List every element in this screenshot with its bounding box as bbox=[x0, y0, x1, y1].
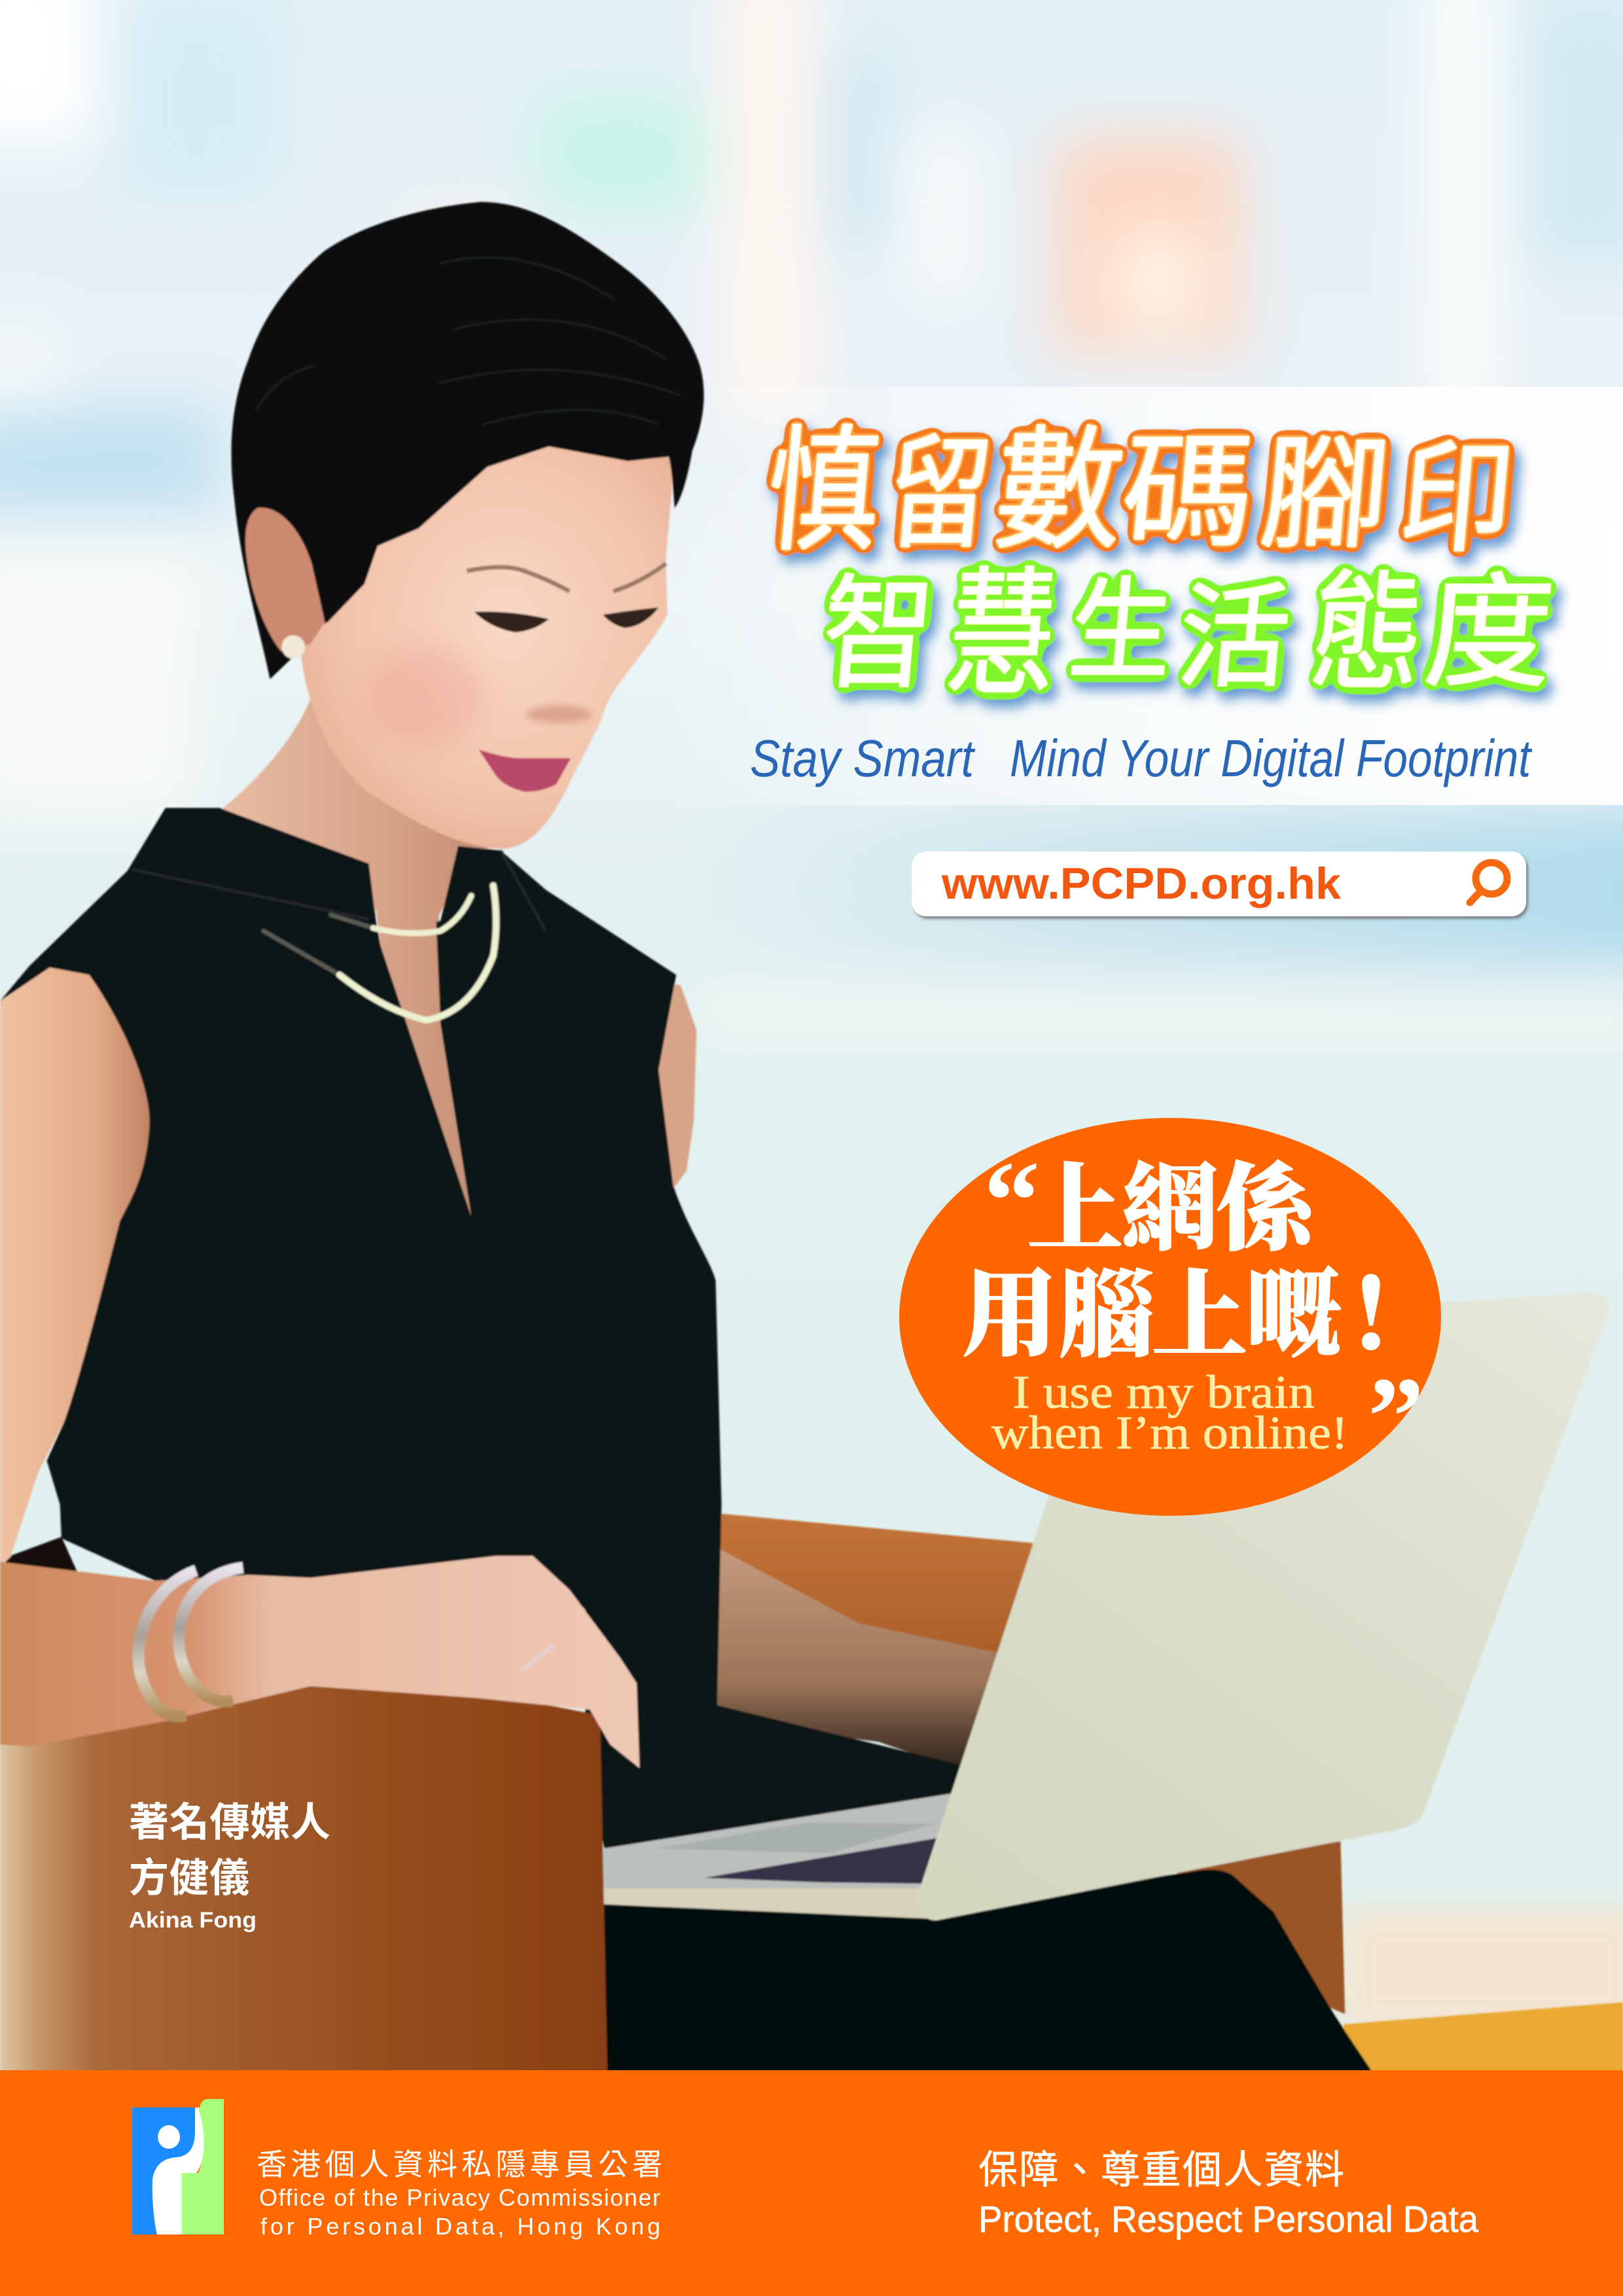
near forearm and hand bbox=[0, 1556, 639, 1768]
legs bbox=[600, 1870, 1373, 2073]
quote chinese line 2: 用腦上嘅！ bbox=[962, 1263, 1419, 1369]
slogan english bbox=[750, 729, 1532, 787]
slogan title: chinese line 2: 度 bbox=[1419, 533, 1561, 711]
organisation name: Office of the Privacy Commissioner bbox=[259, 2184, 660, 2211]
organisation name: 香港個人資料私隱專員公署 bbox=[257, 2147, 662, 2181]
slogan title: chinese line 1 bbox=[760, 381, 1521, 577]
floor bbox=[1344, 2002, 1623, 2079]
closing quote: ” bbox=[1368, 1355, 1424, 1479]
slogan title: chinese line 2: 生 bbox=[1064, 541, 1180, 701]
face bbox=[300, 439, 673, 849]
slogan english: Mind Your Digital Footprint bbox=[1010, 729, 1532, 787]
lips bbox=[478, 749, 571, 792]
icon: pcpd logo bbox=[132, 2099, 224, 2234]
person caption bbox=[129, 1800, 330, 1933]
quote english: I use my brain bbox=[1012, 1366, 1315, 1418]
slogan english: Stay Smart bbox=[750, 729, 975, 787]
laptop base bbox=[603, 1790, 973, 1919]
hair bbox=[231, 202, 704, 679]
slogan title: chinese line 1: 慎 bbox=[760, 381, 889, 577]
tagline: 保障、尊重個人資料 bbox=[978, 2148, 1344, 2192]
tagline: Protect, Respect Personal Data bbox=[978, 2198, 1478, 2240]
chair arm left bbox=[0, 1676, 607, 2073]
trackpad bbox=[657, 1822, 936, 1853]
speech bubble bbox=[899, 1118, 1441, 1516]
person caption: Akina Fong bbox=[129, 1908, 257, 1933]
slogan title: chinese line 2: 智 bbox=[816, 534, 942, 713]
organisation name: for Personal Data, Hong Kong bbox=[260, 2213, 660, 2240]
ring bbox=[522, 1645, 553, 1670]
organisation name bbox=[257, 2147, 662, 2240]
person caption: 著名傳媒人 bbox=[129, 1800, 330, 1844]
slogan title: chinese line 1: 印 bbox=[1395, 399, 1521, 577]
chair side right bbox=[1171, 1841, 1345, 2014]
slogan title: chinese line 1: 數 bbox=[989, 383, 1132, 575]
nose shadow bbox=[527, 706, 591, 723]
quote english: when I’m online! bbox=[991, 1407, 1348, 1459]
search box bbox=[912, 852, 1526, 916]
earring bbox=[281, 636, 305, 658]
ear bbox=[245, 508, 325, 651]
blouse bbox=[0, 808, 980, 1856]
footer bar bbox=[0, 2070, 1623, 2296]
hair highlights bbox=[256, 257, 681, 425]
near upper arm bbox=[0, 967, 155, 1566]
website url: www.PCPD.org.hk bbox=[941, 859, 1341, 908]
person caption: 方健儀 bbox=[129, 1856, 249, 1900]
quote chinese line 1: 上網係 bbox=[1027, 1157, 1321, 1263]
slogan title: chinese line 2: 態 bbox=[1304, 529, 1432, 716]
neck bbox=[219, 688, 505, 1216]
keyboard bbox=[704, 1837, 944, 1884]
tagline bbox=[978, 2148, 1478, 2240]
slogan title: chinese line 1: 留 bbox=[882, 394, 999, 572]
collar shading bbox=[132, 850, 546, 931]
quote english bbox=[991, 1366, 1348, 1459]
slogan title: chinese line 2 bbox=[816, 523, 1561, 723]
far forearm bbox=[702, 1543, 1010, 1774]
slogan title: chinese line 1: 碼 bbox=[1116, 392, 1262, 570]
base front edge bbox=[603, 1888, 936, 1919]
chair back right bbox=[702, 1513, 1061, 1698]
far shoulder bbox=[644, 980, 696, 1189]
eyebrows bbox=[467, 564, 666, 591]
icon: magnifier bbox=[1470, 863, 1507, 903]
eyes bbox=[474, 607, 658, 632]
blush bbox=[366, 645, 483, 745]
floor haze bbox=[1342, 1908, 1623, 2032]
slogan title: chinese line 1: 腳 bbox=[1255, 395, 1398, 573]
white title band bbox=[654, 387, 1623, 805]
slogan title: chinese line 2: 慧 bbox=[942, 523, 1065, 723]
chair back left bbox=[0, 1537, 88, 1596]
bracelets bbox=[139, 1568, 243, 1716]
necklace bbox=[264, 886, 496, 1020]
laptop lid bbox=[916, 1293, 1609, 1920]
slogan title: chinese line 2: 活 bbox=[1173, 546, 1298, 709]
opening quote: “ bbox=[984, 1139, 1040, 1263]
